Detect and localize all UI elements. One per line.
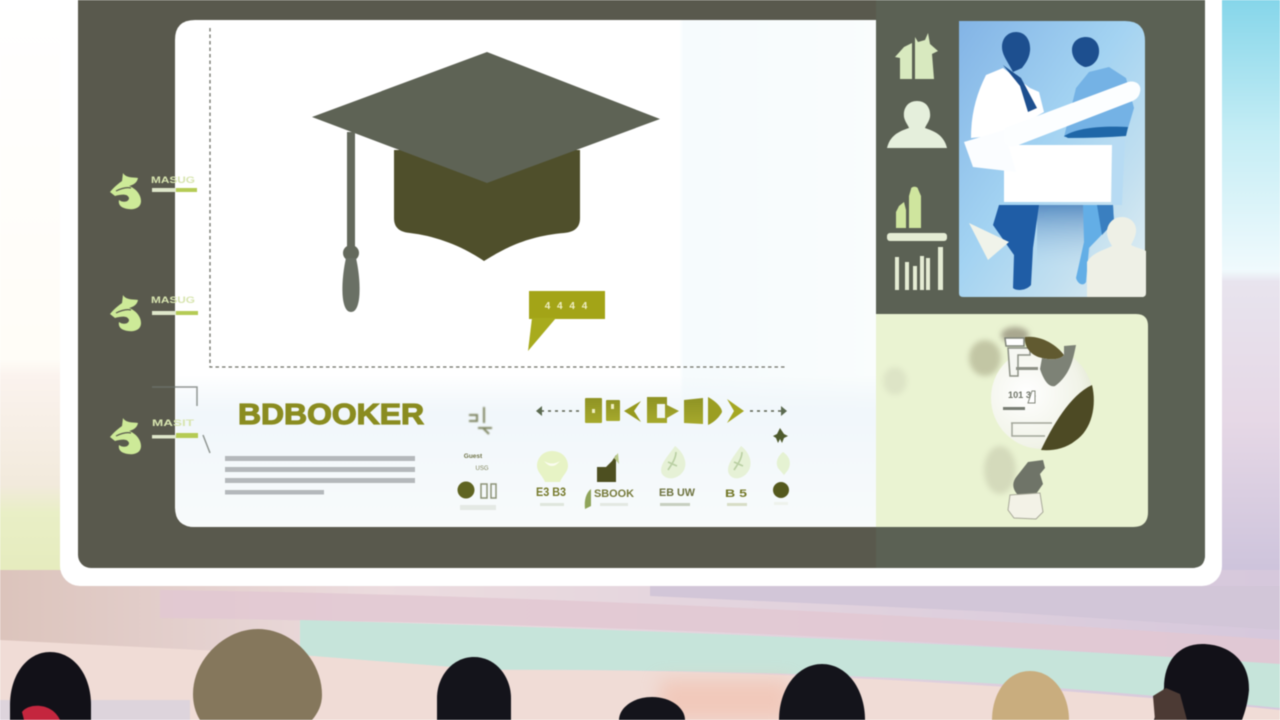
left labels: marker 3: MASIT xyxy=(152,418,194,429)
left labels: marker 2 xyxy=(110,295,198,331)
icon: person xyxy=(887,101,947,148)
column: bulb and label 1 xyxy=(536,451,568,506)
dark slide background xyxy=(78,0,1205,568)
base xyxy=(1013,460,1045,494)
foreground person xyxy=(1087,217,1146,297)
sphere labels: 101 38 xyxy=(1008,390,1036,400)
sphere xyxy=(991,347,1093,449)
icon: bottles xyxy=(896,187,921,228)
column: leaf and label 4 xyxy=(725,446,751,506)
heading: lower left title: BDBOOKER xyxy=(238,399,424,431)
person right head xyxy=(1072,37,1099,67)
icon: graduation cap xyxy=(312,52,660,312)
connector bracket xyxy=(152,387,210,453)
leaf grey top xyxy=(1040,345,1076,386)
heading: arrow title with dashed line xyxy=(536,397,787,425)
small diagram column: USG xyxy=(475,466,489,472)
panel: blue illustration of two people xyxy=(959,21,1146,297)
foreground paper xyxy=(969,223,1009,260)
icon: small clover xyxy=(773,428,788,443)
left leg xyxy=(993,205,1039,290)
left labels: marker 1: MASUG xyxy=(151,175,195,186)
small diagram column xyxy=(458,407,496,510)
sphere labels xyxy=(1003,338,1052,436)
panel: pale green sphere illustration xyxy=(876,314,1148,527)
callout: speech bubble xyxy=(528,291,605,351)
text block: placeholder lines xyxy=(225,456,415,494)
leaf dark large xyxy=(1041,385,1094,450)
audience: person 3 head xyxy=(437,657,511,720)
right leg xyxy=(1076,205,1114,284)
audience: person 6 blonde head xyxy=(992,671,1069,720)
icon: house xyxy=(895,33,938,79)
leaf dark top xyxy=(1025,337,1064,359)
tie xyxy=(1003,65,1037,112)
column: leaf and label 3: EB UW xyxy=(659,487,696,499)
left labels: marker 2: MASUG xyxy=(151,295,195,306)
column: faint bulb and dot 5 xyxy=(773,452,790,505)
column: factory and label 2 xyxy=(585,453,634,509)
projection screen frame xyxy=(60,0,1222,586)
person left head xyxy=(1002,32,1030,72)
audience: person 1 head xyxy=(10,652,91,720)
audience: person 5 head xyxy=(779,664,865,720)
rolled scroll xyxy=(1004,82,1140,147)
dashed content outline xyxy=(210,28,785,367)
callout: speech bubble: 4 4 4 4 xyxy=(545,301,589,312)
small diagram column: Guest xyxy=(464,453,483,460)
panel: main white board xyxy=(175,20,876,527)
left labels: marker 1 xyxy=(110,173,197,209)
column: bulb and label 1: E3 B3 xyxy=(536,485,566,499)
audience: person 2 curly head xyxy=(193,629,322,720)
column: leaf and label 4: B 5 xyxy=(725,488,747,500)
audience: person 7 head xyxy=(1153,644,1249,720)
icon: shelf and bars xyxy=(887,233,947,290)
audience: person 4 head xyxy=(619,697,685,720)
left labels: marker 3 xyxy=(110,418,198,454)
column: leaf and label 3 xyxy=(659,446,696,506)
column: factory and label 2: SBOOK xyxy=(594,488,634,500)
paper board xyxy=(1004,145,1112,202)
backpack xyxy=(1064,67,1134,137)
person left shirt xyxy=(971,68,1044,138)
